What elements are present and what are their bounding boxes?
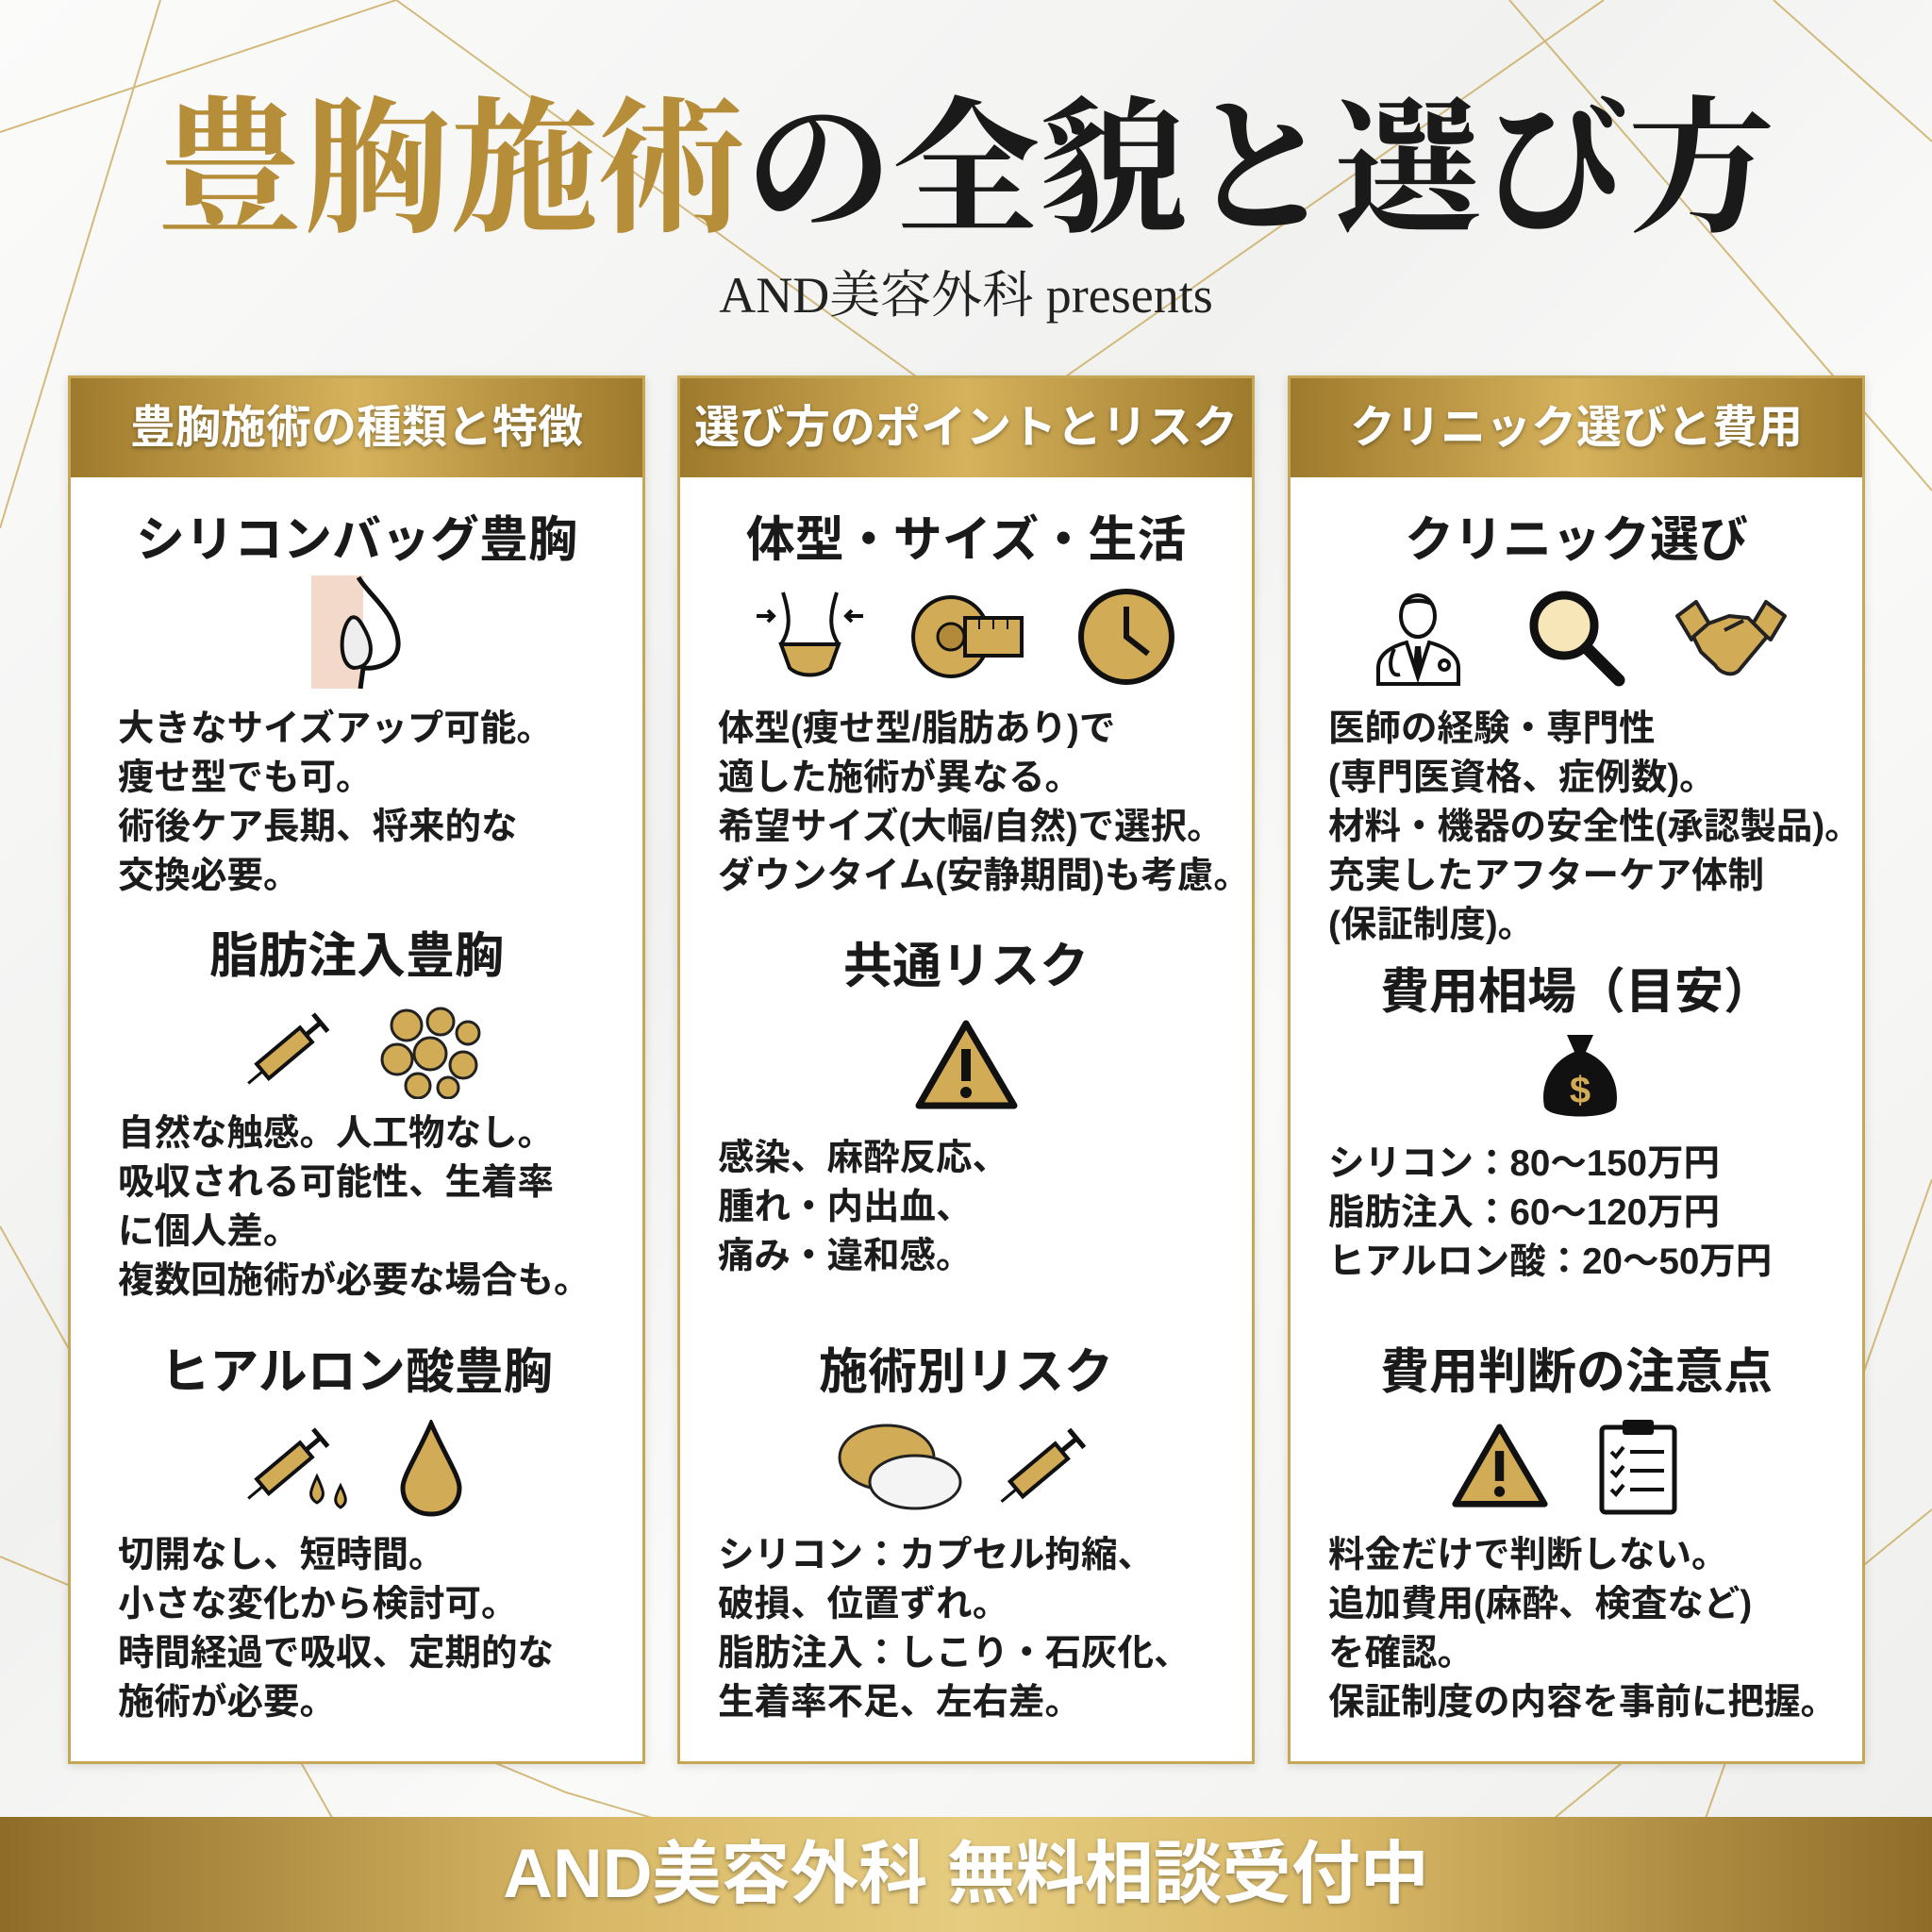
- header band 3: [1291, 378, 1862, 477]
- text: clinic: (保証制度)。: [1328, 905, 1534, 945]
- header band 2: [680, 378, 1252, 477]
- icon: syringe: [247, 1012, 330, 1085]
- text: body: 体型(痩せ型/脂肪あり)で: [718, 708, 1115, 749]
- header band 2: 選び方のポイントとリスク: [694, 403, 1238, 453]
- header band 3: クリニック選びと費用: [1350, 403, 1803, 453]
- icon: warning: [1452, 1424, 1548, 1507]
- text: body: ダウンタイム(安静期間)も考慮。: [718, 856, 1250, 896]
- text: silicone: 大きなサイズアップ可能。: [118, 708, 553, 749]
- panel: clinic & cost: [1288, 375, 1865, 1764]
- text: cost notes: を確認。: [1328, 1633, 1474, 1674]
- icon: tape measure: [911, 595, 1024, 678]
- icon: breast implant: [311, 575, 401, 689]
- text: common risks: 痛み・違和感。: [718, 1236, 973, 1276]
- heading: body: 体型・サイズ・生活: [746, 513, 1186, 568]
- text: hyaluronic: 小さな変化から検討可。: [118, 1584, 518, 1624]
- text: hyaluronic: [118, 1535, 554, 1723]
- text: procedure risks: [718, 1535, 1191, 1723]
- heading: cost: 費用相場（目安）: [1380, 965, 1773, 1020]
- text: silicone: 交換必要。: [118, 856, 300, 896]
- text: body: [718, 708, 1250, 896]
- icon: magnifier: [1530, 591, 1624, 687]
- icon: money bag: $: [1570, 1070, 1591, 1111]
- text: body: 希望サイズ(大幅/自然)で選択。: [718, 807, 1224, 847]
- text: common risks: [718, 1138, 1008, 1276]
- text: hyaluronic: 時間経過で吸収、定期的な: [118, 1633, 554, 1674]
- text: clinic: [1328, 708, 1861, 945]
- icon: syringe: [1000, 1428, 1087, 1503]
- text: hyaluronic: 切開なし、短時間。: [118, 1535, 445, 1575]
- icon: doctor: [1376, 593, 1460, 686]
- text: cost: 脂肪注入：60〜120万円: [1328, 1192, 1720, 1233]
- text: cost notes: 料金だけで判断しない。: [1328, 1535, 1728, 1575]
- text: fat: 自然な触感。人工物なし。: [118, 1113, 554, 1154]
- heading: clinic: クリニック選び: [1405, 513, 1748, 568]
- icon: warning: [915, 1021, 1017, 1109]
- heading: silicone: シリコンバッグ豊胸: [136, 513, 577, 568]
- text: cost notes: [1328, 1535, 1837, 1723]
- icon: waist: [757, 591, 863, 677]
- panel: points & risks: [677, 375, 1255, 1764]
- text: procedure risks: 破損、位置ずれ。: [718, 1584, 1008, 1624]
- heading: common risks: 共通リスク: [843, 940, 1089, 994]
- text: common risks: 腫れ・内出血、: [718, 1187, 973, 1227]
- icon: clock: [1078, 589, 1174, 685]
- text: hyaluronic: 施術が必要。: [118, 1682, 336, 1723]
- text: fat: [118, 1113, 591, 1301]
- icon: handshake: [1675, 600, 1787, 675]
- text: procedure risks: 生着率不足、左右差。: [718, 1682, 1081, 1723]
- text: silicone: 術後ケア長期、将来的な: [118, 807, 518, 847]
- text: clinic: 充実したアフターケア体制: [1328, 856, 1764, 896]
- header band 1: 豊胸施術の種類と特徴: [130, 403, 583, 453]
- heading: fat: 脂肪注入豊胸: [209, 929, 504, 984]
- text: clinic: 材料・機器の安全性(承認製品)。: [1328, 807, 1861, 847]
- text: silicone: [118, 708, 553, 896]
- icon: syringe with drops: [247, 1427, 347, 1509]
- subtitle: AND美容外科 presents: [719, 267, 1213, 324]
- panel: types: [68, 375, 645, 1764]
- text: fat: 複数回施術が必要な場合も。: [118, 1260, 591, 1301]
- text: clinic: 医師の経験・専門性: [1328, 708, 1656, 749]
- text: cost: [1328, 1143, 1772, 1282]
- text: cost: シリコン：80〜150万円: [1328, 1143, 1720, 1184]
- text: cost: ヒアルロン酸：20〜50万円: [1328, 1241, 1772, 1282]
- heading: procedure risks: 施術別リスク: [819, 1345, 1113, 1400]
- heading: hyaluronic: ヒアルロン酸豊胸: [160, 1345, 553, 1400]
- icon: drop: [400, 1420, 462, 1517]
- text: cost notes: 保証制度の内容を事前に把握。: [1328, 1682, 1837, 1723]
- text: fat: 吸収される可能性、生着率: [118, 1162, 554, 1203]
- text: procedure risks: 脂肪注入：しこり・石灰化、: [718, 1633, 1191, 1674]
- text: fat: に個人差。: [118, 1211, 300, 1252]
- icon: clipboard: [1600, 1420, 1677, 1515]
- footer banner: [0, 1817, 1932, 1932]
- text: cost notes: 追加費用(麻酔、検査など): [1328, 1584, 1752, 1624]
- header band 1: [71, 378, 642, 477]
- text: body: 適した施術が異なる。: [718, 758, 1081, 798]
- icon: money bag: [1543, 1035, 1617, 1117]
- text: procedure risks: シリコン：カプセル拘縮、: [718, 1535, 1154, 1575]
- text: common risks: 感染、麻酔反応、: [718, 1138, 1008, 1178]
- icon: implants: [838, 1424, 962, 1509]
- icon: fat cells: [381, 1008, 481, 1099]
- title: 豊胸施術の全貌と選び方: [157, 89, 1775, 252]
- heading: cost notes: 費用判断の注意点: [1380, 1345, 1773, 1400]
- text: silicone: 痩せ型でも可。: [118, 758, 373, 798]
- footer banner: AND美容外科 無料相談受付中: [503, 1836, 1429, 1912]
- text: clinic: (専門医資格、症例数)。: [1328, 758, 1716, 798]
